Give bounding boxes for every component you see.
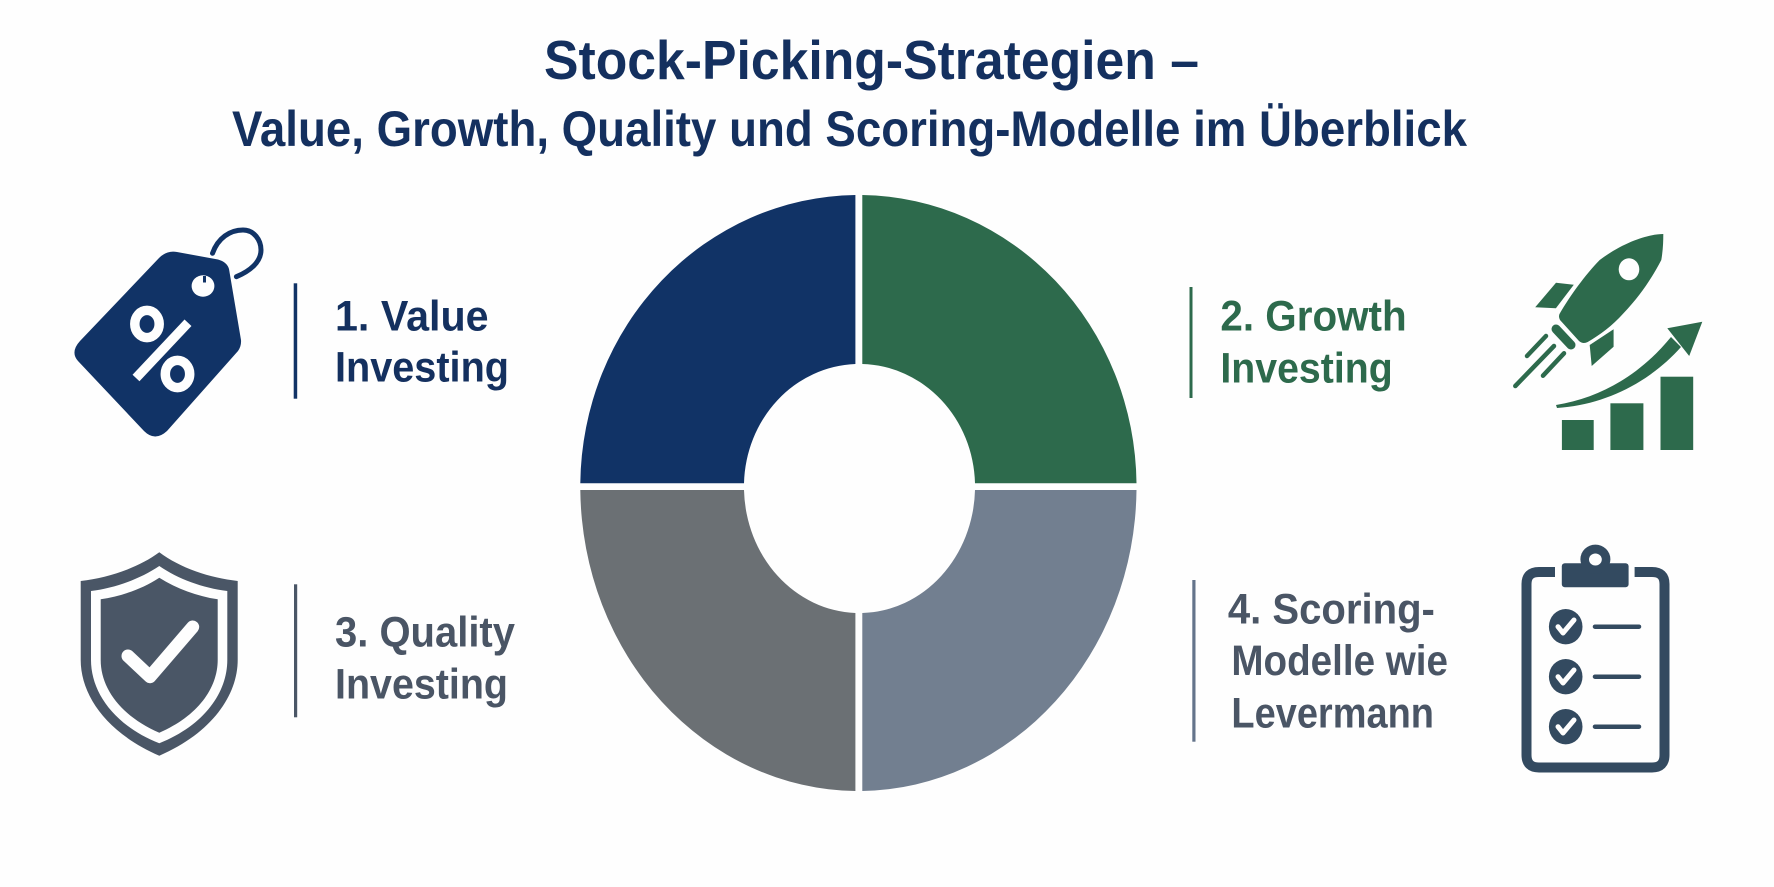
label: value investing	[335, 293, 509, 392]
panel: quality investing	[81, 552, 515, 756]
panel: value investing	[74, 230, 509, 436]
title: Stock-Picking-Strategien –	[544, 29, 1199, 91]
label: quality investing	[335, 609, 515, 708]
icon: clipboard checklist	[1526, 545, 1664, 768]
icon: shield with check	[81, 552, 238, 756]
icon: price tag with percent	[74, 230, 261, 436]
panel: growth investing	[1190, 234, 1702, 450]
label: growth investing: 2. Growth	[1220, 293, 1407, 341]
label: scoring models: 4. Scoring-	[1228, 585, 1435, 633]
segment: value	[580, 195, 855, 483]
label: quality investing: Investing	[335, 660, 508, 708]
segment: quality	[580, 490, 855, 791]
segment: scoring	[862, 490, 1136, 791]
panel: scoring models	[1192, 545, 1664, 768]
label: value investing: 1. Value	[335, 293, 489, 341]
divider	[294, 283, 297, 399]
segment: growth	[862, 195, 1136, 483]
icon: rocket with rising bars	[1515, 234, 1702, 450]
label: value investing: Investing	[335, 344, 509, 392]
divider	[1190, 287, 1192, 398]
label: quality investing: 3. Quality	[335, 609, 515, 657]
label: scoring models: Levermann	[1231, 689, 1434, 737]
title	[232, 29, 1467, 157]
label: growth investing	[1220, 293, 1407, 392]
label: scoring models: Modelle wie	[1231, 637, 1448, 685]
label: growth investing: Investing	[1220, 344, 1393, 392]
donut chart	[580, 195, 1136, 791]
divider	[294, 584, 297, 717]
label: scoring models	[1228, 585, 1448, 737]
divider	[1192, 580, 1196, 742]
title: Value, Growth, Quality und Scoring-Modelle im Überblick	[232, 101, 1467, 157]
